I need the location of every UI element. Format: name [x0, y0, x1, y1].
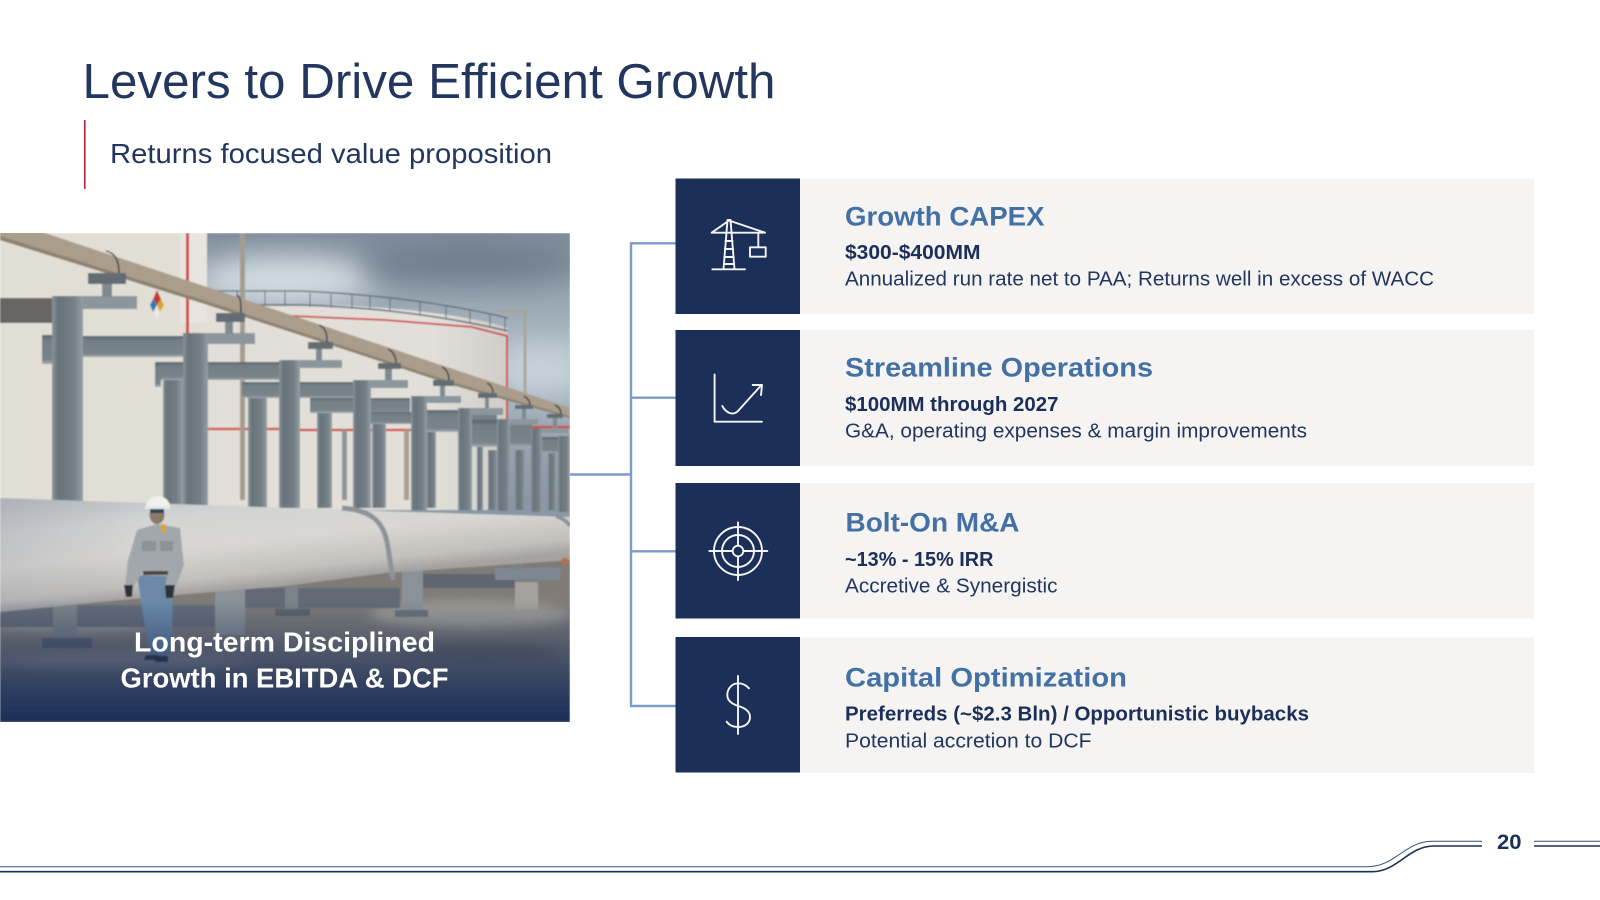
- heading: Streamline Operations: [845, 353, 1153, 383]
- connector lines: [570, 243, 676, 706]
- photo panel: pipeline and storage tanks: [0, 218, 590, 725]
- card: Growth CAPEX: [676, 178, 1534, 314]
- icon tile: dollar sign: [676, 637, 800, 772]
- description: Accretive & Synergistic: [845, 575, 1058, 597]
- photo caption: Long-term Disciplined: [134, 627, 435, 658]
- heading: Capital Optimization: [845, 663, 1127, 693]
- value: ~13% - 15% IRR: [845, 548, 994, 571]
- title: Levers to Drive Efficient Growth: [82, 55, 776, 109]
- heading: Bolt-On M&A: [846, 508, 1020, 538]
- photo artwork: [0, 218, 590, 725]
- description: Annualized run rate net to PAA; Returns well in excess of WACC: [845, 269, 1434, 291]
- card: Streamline Operations: [676, 330, 1534, 466]
- value: $300-$400MM: [845, 241, 980, 264]
- subtitle: Returns focused value proposition: [110, 138, 552, 169]
- icon tile: growth chart: [676, 330, 800, 466]
- card: Bolt-On M&A: [676, 483, 1534, 618]
- photo caption: [122, 632, 448, 688]
- page number: 20: [1497, 830, 1522, 854]
- value: $100MM through 2027: [845, 393, 1058, 416]
- icon tile: target: [676, 483, 800, 618]
- photo caption: Growth in EBITDA & DCF: [120, 662, 448, 693]
- card: Capital Optimization: [676, 637, 1534, 773]
- icon tile: crane: [676, 178, 800, 314]
- footer swoosh lines: [0, 841, 1600, 872]
- description: G&A, operating expenses & margin improvements: [845, 420, 1307, 442]
- description: Potential accretion to DCF: [845, 730, 1092, 752]
- heading: Growth CAPEX: [845, 201, 1044, 231]
- red accent line: [84, 120, 86, 189]
- value: Preferreds (~$2.3 Bln) / Opportunistic buybacks: [845, 702, 1309, 725]
